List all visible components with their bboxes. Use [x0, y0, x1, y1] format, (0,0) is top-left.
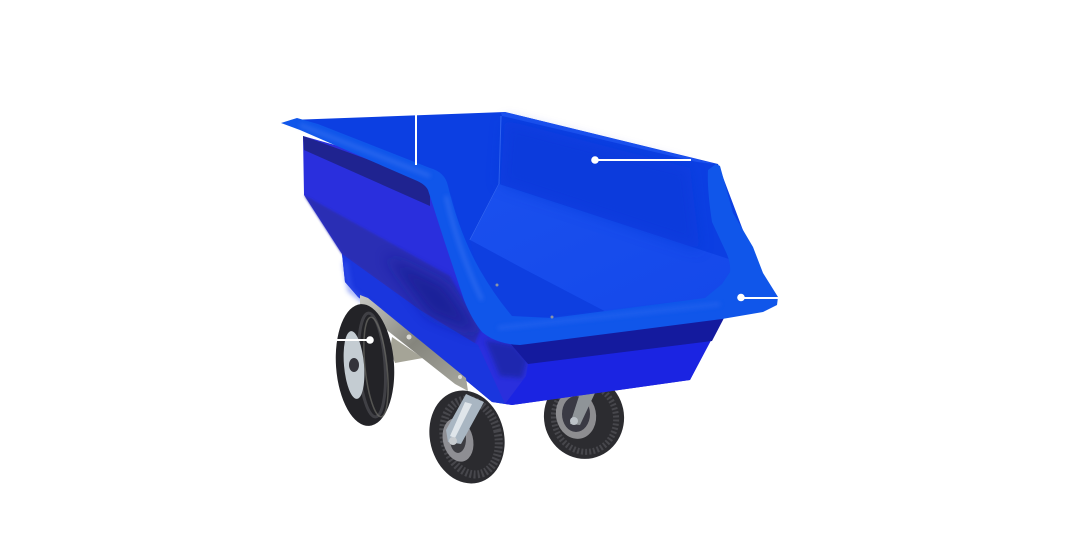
dark strip under the front rim	[510, 318, 724, 364]
cart body exterior	[303, 136, 724, 405]
front slope of floor	[470, 240, 610, 323]
rim band	[281, 118, 778, 345]
floor	[470, 184, 743, 314]
upper lip of far walls	[501, 112, 716, 164]
interior back walls	[290, 112, 758, 335]
dark strip under the side rim	[303, 136, 430, 206]
rear right wheel	[536, 368, 632, 466]
dark grey-blue band	[304, 195, 480, 345]
callout: back wall line with dot	[591, 156, 691, 164]
front center wheel	[420, 382, 514, 492]
rim highlights	[300, 125, 482, 300]
rivets	[550, 316, 554, 318]
callout: right lip line with dot	[737, 294, 778, 301]
corner crease	[470, 116, 501, 240]
left wheel	[332, 302, 398, 428]
callout: wheel line with dot	[334, 336, 374, 344]
corner wall shading	[500, 120, 700, 250]
callout: top rim vertical line	[415, 114, 417, 165]
cart interior and rim	[281, 112, 778, 345]
lower hull	[342, 254, 505, 404]
front left axle plate	[360, 295, 468, 391]
left axle bracket behind wheel	[390, 337, 423, 363]
